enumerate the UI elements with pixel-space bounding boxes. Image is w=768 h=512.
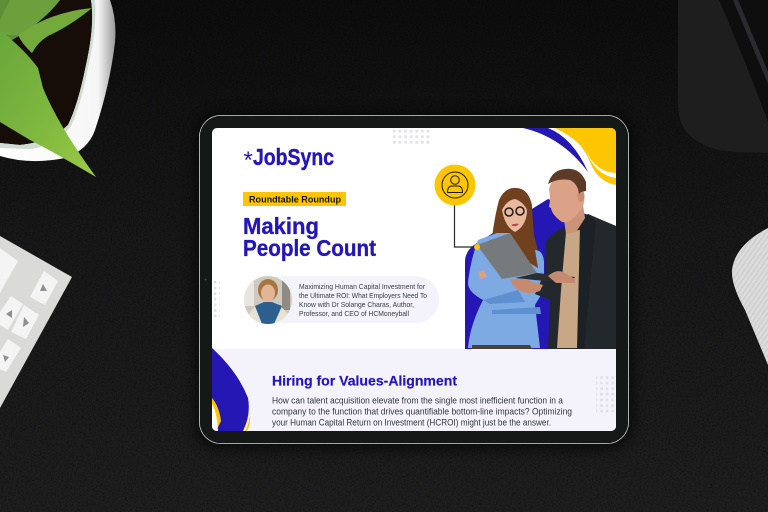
guest description: Maximizing Human Capital Investment for <box>299 282 426 291</box>
man jacket placket <box>577 214 588 348</box>
title <box>243 213 376 261</box>
section heading: Hiring for Values-Alignment <box>272 372 457 388</box>
keyboard <box>0 236 72 408</box>
man ear <box>578 192 584 202</box>
person icon badge <box>434 164 476 206</box>
section body: company to the function that drives quantifiable bottom-line impacts? Optimizing <box>272 406 572 416</box>
guest description <box>299 282 427 318</box>
section body: How can talent acquisition elevate from the single most inefficient function in a <box>272 396 563 406</box>
logo: JobSync <box>253 144 334 170</box>
tablet camera <box>204 278 206 280</box>
hands <box>510 271 575 293</box>
man shirt <box>557 230 580 348</box>
top right swoosh <box>523 128 616 185</box>
guest pill <box>243 276 439 324</box>
guest photo <box>243 276 293 324</box>
guest description: Know with Dr Solange Charas, Author, <box>299 300 414 309</box>
monitor base <box>678 0 768 153</box>
tablet shadow <box>194 112 634 450</box>
dot grid: lower right <box>596 376 614 412</box>
photo: two colleagues with laptop <box>468 169 616 349</box>
section body <box>272 396 572 428</box>
woman trousers <box>472 345 532 349</box>
tablet screen <box>212 128 616 431</box>
guest description: the Ultimate ROI: What Employers Need To <box>299 291 427 300</box>
woman lips <box>511 224 519 226</box>
woman glasses <box>505 207 524 216</box>
lower panel <box>212 348 616 431</box>
laptop <box>477 233 537 279</box>
man jacket <box>535 214 616 349</box>
woman jacket <box>468 233 544 348</box>
woman jacket shading <box>483 290 541 314</box>
blue hexagon backdrop <box>465 199 616 349</box>
logo <box>244 148 334 170</box>
man hair <box>548 169 586 194</box>
title: Making <box>243 213 319 239</box>
woman crossed hand <box>478 270 487 279</box>
tablet body <box>199 115 629 444</box>
man neck <box>563 205 585 234</box>
connector dot <box>474 244 480 250</box>
woman hair <box>492 188 542 270</box>
guest description: Professor, and CEO of HCMoneyball <box>299 309 409 318</box>
pen <box>719 0 768 122</box>
section body: your Human Capital Return on Investment (HCROI) might just be the answer. <box>272 418 551 428</box>
dot grid: top <box>393 130 430 144</box>
dot grid: left <box>214 281 220 318</box>
title: People Count <box>243 235 376 261</box>
man head <box>549 176 584 222</box>
logo: * <box>244 147 253 174</box>
woman hair fringe <box>502 198 527 210</box>
plant pot with leaves <box>0 0 115 177</box>
mouse <box>732 228 768 365</box>
tag: Roundtable Roundup: Roundtable Roundup <box>249 194 342 204</box>
tag: Roundtable Roundup <box>243 192 346 206</box>
woman face <box>502 198 527 232</box>
lower panel swoosh <box>212 348 250 431</box>
connector line <box>454 205 477 247</box>
